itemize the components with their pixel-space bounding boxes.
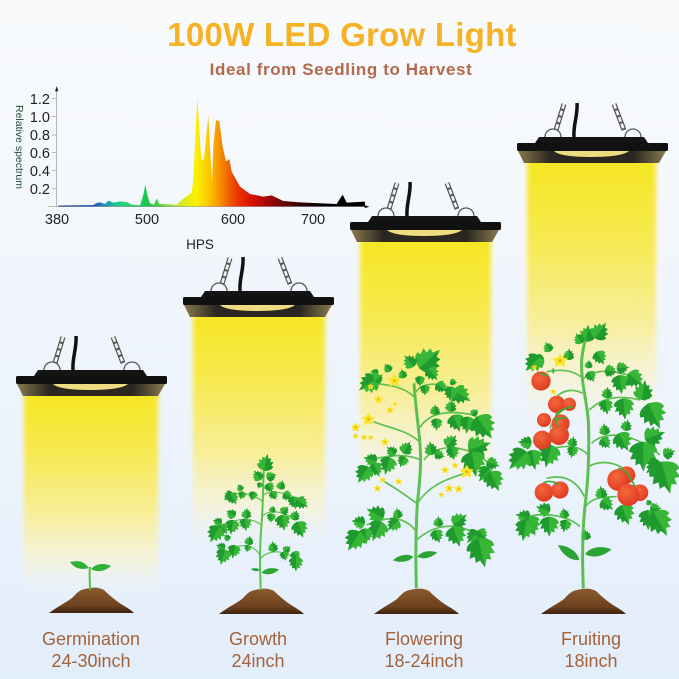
stage label: flowering: 18-24inch bbox=[384, 651, 464, 671]
y axis ticks bbox=[30, 92, 50, 198]
light beam: flowering bbox=[360, 236, 491, 492]
soil: flowering bbox=[374, 589, 459, 614]
y axis label: Relative spectrum bbox=[13, 105, 25, 189]
spectrum chart bbox=[13, 86, 369, 252]
y axis ticks: 0.4 bbox=[30, 164, 50, 180]
x axis ticks: 380 bbox=[45, 212, 69, 228]
light beam: growth bbox=[193, 311, 325, 542]
soil: growth bbox=[219, 589, 304, 614]
plant: growth bbox=[203, 452, 312, 590]
lamp: growth bbox=[183, 257, 334, 317]
y axis ticks: 0.2 bbox=[30, 182, 50, 198]
plant: flowering bbox=[339, 340, 508, 588]
stage label: fruiting: 18inch bbox=[564, 651, 618, 671]
stage label: growth: 24inch bbox=[231, 651, 285, 671]
stage label: germination: 24-30inch bbox=[51, 651, 131, 671]
stage label: germination: Germination bbox=[42, 629, 140, 649]
y axis ticks: 0.8 bbox=[30, 128, 50, 144]
x axis ticks: 500 bbox=[135, 212, 159, 228]
plant: fruiting bbox=[501, 317, 679, 588]
lamp: flowering bbox=[350, 182, 501, 242]
plant: germination sprout bbox=[70, 561, 111, 590]
lamp: germination bbox=[16, 336, 167, 396]
stage label: flowering: Flowering bbox=[385, 629, 463, 649]
soil: fruiting bbox=[541, 589, 626, 614]
lamp: fruiting bbox=[517, 103, 668, 163]
spectrum area bbox=[48, 86, 369, 208]
x axis ticks: 600 bbox=[221, 212, 245, 228]
x axis ticks bbox=[45, 212, 325, 228]
stage label: growth: Growth bbox=[229, 629, 287, 649]
stage label: fruiting: Fruiting bbox=[561, 629, 621, 649]
light beam: germination bbox=[24, 390, 158, 591]
y axis ticks: 1.2 bbox=[30, 92, 50, 108]
x axis ticks: 700 bbox=[301, 212, 325, 228]
soil: germination bbox=[49, 588, 134, 613]
chart caption: HPS bbox=[186, 237, 214, 252]
subtitle: Ideal from Seedling to Harvest bbox=[210, 60, 472, 79]
title: 100W LED Grow Light bbox=[167, 16, 517, 53]
y axis ticks: 1.0 bbox=[30, 110, 50, 126]
light beam: fruiting bbox=[527, 157, 656, 423]
y axis ticks: 0.6 bbox=[30, 146, 50, 162]
